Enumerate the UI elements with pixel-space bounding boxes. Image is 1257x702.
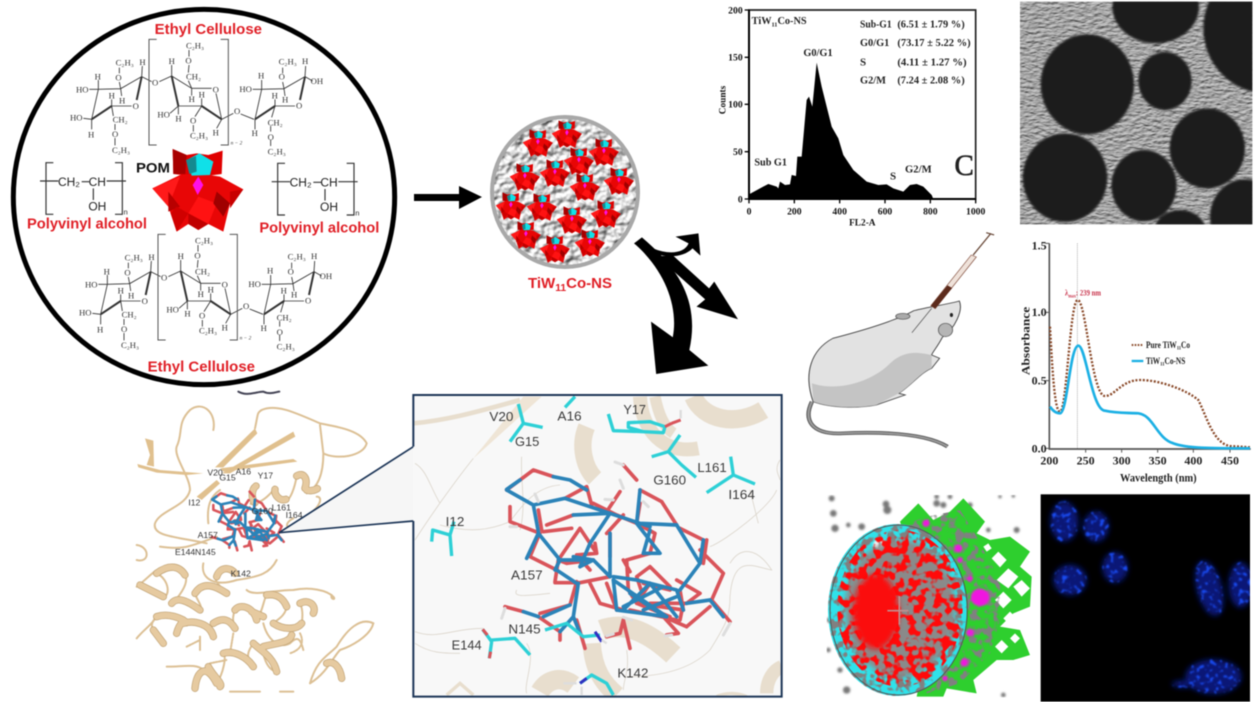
panel: docking close-up: [413, 395, 782, 697]
residue labels: A16: [557, 409, 582, 424]
annotations: [752, 15, 974, 182]
residue labels: K142: [617, 665, 648, 680]
structure: bottom ethyl cellulose: H: [208, 285, 214, 295]
structure: bottom ethyl cellulose: OH: [320, 271, 332, 281]
residue labels: V20: [207, 468, 223, 478]
structure: top ethyl cellulose: n − 2: [231, 141, 243, 147]
structure: top ethyl cellulose: H: [199, 90, 205, 100]
axes and frame: [749, 10, 976, 199]
structure: top ethyl cellulose: C₂H₃: [186, 41, 204, 51]
residue labels: [446, 402, 755, 680]
heading: Polyvinyl alcohol right: Polyvinyl alcohol: [259, 220, 379, 236]
residue labels: K142: [231, 569, 251, 579]
annotations: Co-NS: [777, 15, 807, 27]
structure: bottom ethyl cellulose: H: [261, 323, 267, 333]
icon: mouse with syringe: [809, 233, 994, 447]
annotations: Sub-G1: [860, 18, 892, 30]
ribbon loops: [137, 392, 373, 692]
heading: Ethyl Cellulose top: Ethyl Cellulose: [155, 22, 262, 38]
axis labels: 300: [1113, 454, 1131, 468]
structure: top ethyl cellulose: OH: [311, 76, 323, 86]
structure: top ethyl cellulose: O: [115, 73, 122, 83]
structure: polyvinyl alcohol left: OH: [88, 199, 106, 213]
residue labels: I12: [188, 498, 201, 508]
structure: top ethyl cellulose: H: [302, 56, 308, 66]
axis labels: 1.5: [1032, 238, 1047, 252]
legend: Co: [1181, 340, 1190, 350]
structure: polyvinyl alcohol right: CH₂: [290, 176, 312, 190]
residue labels: G160: [252, 506, 273, 516]
residue labels: V20: [489, 409, 513, 424]
white gaps: [983, 543, 1030, 653]
residue labels: G15: [219, 473, 236, 483]
annotations: G2/M: [905, 164, 932, 176]
hydrogens: [502, 462, 730, 636]
annotations: (7.24 ± 2.08 %): [897, 74, 965, 86]
chart: absorbance spectra: [1018, 238, 1251, 485]
annotations: S: [890, 170, 896, 182]
heading: POM label: POM: [136, 160, 170, 176]
heading: Ethyl Cellulose bottom: Ethyl Cellulose: [148, 359, 255, 375]
structure: polyvinyl alcohol left: [40, 163, 128, 217]
thin loops: [415, 457, 780, 693]
residue tips: [483, 420, 681, 658]
panel border: [413, 395, 782, 697]
axis labels: [1018, 238, 1239, 485]
legend: Co-NS: [1165, 356, 1185, 366]
structure: polyvinyl alcohol left: CH: [89, 175, 106, 189]
structure: bottom ethyl cellulose: C₂H₃: [125, 252, 143, 262]
residue labels: L161: [272, 503, 291, 513]
syringe barrel: [931, 255, 976, 309]
annotations: G2/M: [860, 74, 887, 86]
white holes: [873, 539, 887, 551]
panel: protein ribbon overview: [137, 392, 373, 692]
structure: top ethyl cellulose: O: [152, 78, 158, 88]
structure: bottom ethyl cellulose: C₂H₃: [199, 326, 217, 336]
structure: top ethyl cellulose: H: [175, 113, 182, 123]
structure: top ethyl cellulose: O: [213, 84, 219, 94]
axis labels: Wavelength (nm): [1120, 471, 1197, 485]
structure: bottom ethyl cellulose: O: [288, 266, 294, 276]
structure: bottom ethyl cellulose: H: [148, 252, 155, 262]
ligand cluster: [212, 492, 284, 550]
structure: top ethyl cellulose: C₂H₃: [268, 147, 286, 157]
structure: bottom ethyl cellulose: O: [142, 296, 148, 306]
red speckle: [837, 530, 963, 687]
structure: bottom ethyl cellulose: H: [291, 289, 297, 299]
residue labels: N145: [195, 547, 216, 557]
structure: top ethyl cellulose: HO: [157, 110, 170, 120]
structure: bottom ethyl cellulose: [79, 234, 332, 352]
axis labels: 200: [728, 5, 743, 16]
arrows: three curved branches: [634, 233, 738, 374]
axis labels: 400: [1184, 454, 1202, 468]
structure: bottom ethyl cellulose: H: [198, 289, 204, 299]
ear rear: [896, 313, 910, 319]
legend: TiW: [1146, 356, 1163, 366]
annotations: Sub G1: [754, 157, 787, 169]
structure: top ethyl cellulose: H: [88, 129, 94, 139]
curve: nanosphere: [1050, 346, 1250, 448]
structure: top ethyl cellulose: O: [234, 106, 240, 116]
structure: top ethyl cellulose: C₂H₃: [116, 57, 134, 67]
structure: bottom ethyl cellulose: H: [178, 251, 184, 261]
structure: bottom ethyl cellulose: O: [243, 301, 249, 311]
structure: top ethyl cellulose: H: [272, 90, 278, 100]
structure: top ethyl cellulose: H: [213, 127, 219, 137]
residue labels: I164: [286, 510, 303, 520]
structure: bottom ethyl cellulose: HO: [248, 279, 261, 289]
grey cyan speckle: [828, 524, 967, 696]
syringe fluid: [931, 285, 952, 309]
structure: top ethyl cellulose: CH₂: [186, 71, 201, 81]
structure: polyvinyl alcohol right: [272, 163, 359, 217]
axis labels: 50: [733, 147, 743, 158]
needle: [912, 308, 932, 333]
structure: bottom ethyl cellulose: CH₂: [122, 310, 137, 320]
ligand sticks: [505, 465, 730, 648]
panel: flow cytometry scatter: [826, 494, 1033, 697]
structure: top ethyl cellulose: [70, 39, 323, 157]
structure: bottom ethyl cellulose: H: [184, 308, 191, 318]
structure: bottom ethyl cellulose: H: [97, 324, 103, 334]
axis labels: 0: [738, 194, 743, 205]
axis labels: 350: [1149, 454, 1167, 468]
legend: [1132, 340, 1190, 368]
gate outline: [830, 525, 967, 695]
annotations: G0/G1: [860, 37, 889, 49]
structure: bottom ethyl cellulose: O: [194, 250, 201, 260]
annotations: (6.51 ± 1.79 %): [897, 18, 965, 30]
axis labels: 100: [728, 100, 743, 111]
axis labels: 400: [832, 207, 847, 218]
pale ribbons: [413, 397, 782, 697]
annotations: S: [860, 56, 866, 68]
grey speckle on green: [907, 510, 1000, 693]
structure: bottom ethyl cellulose: CH₂: [195, 266, 210, 276]
legend: 11: [1177, 346, 1181, 352]
structure: bottom ethyl cellulose: O: [124, 268, 131, 278]
heading: Polyvinyl alcohol left: Polyvinyl alcohol: [27, 216, 147, 232]
label: TiW11Co-NS: 11: [555, 283, 567, 294]
label: TiW11Co-NS: TiW: [528, 276, 554, 292]
axis labels: 1000: [966, 207, 985, 218]
structure: bottom ethyl cellulose: H: [128, 290, 134, 300]
ear front: [938, 323, 953, 337]
residue labels: I12: [446, 514, 464, 529]
structure: top ethyl cellulose: C₂H₃: [279, 56, 297, 66]
structure: bottom ethyl cellulose: H: [267, 266, 273, 276]
axis labels: 200: [1040, 454, 1058, 468]
axis labels: [718, 5, 985, 229]
structure: top ethyl cellulose: O: [185, 55, 192, 65]
body: [809, 301, 960, 407]
residue labels: A157: [198, 530, 218, 540]
structure: polyvinyl alcohol left: CH₂: [58, 175, 80, 189]
structure: bottom ethyl cellulose: H: [281, 285, 287, 295]
structure: bottom ethyl cellulose: H: [104, 266, 110, 276]
annotations: (73.17 ± 5.22 %): [897, 37, 971, 49]
structure: bottom ethyl cellulose: HO: [79, 308, 92, 318]
residue labels: G160: [653, 472, 686, 487]
textured sphere: [490, 115, 640, 270]
icon: POM polyhedron: [152, 149, 243, 232]
panel: nanosphere: [490, 115, 640, 294]
dark particles: [1020, 0, 1254, 226]
structure: top ethyl cellulose: O: [296, 100, 302, 110]
axes: [1049, 243, 1251, 449]
structure: bottom ethyl cellulose: O: [121, 324, 127, 334]
peak label: max: [1068, 293, 1076, 299]
green events: [900, 498, 1032, 697]
structure: polyvinyl alcohol right: OH: [320, 200, 338, 214]
structure: top ethyl cellulose: HO: [70, 113, 83, 123]
residue labels: Y17: [258, 471, 273, 481]
structure: top ethyl cellulose: H: [119, 95, 125, 105]
structure: bottom ethyl cellulose: O: [305, 295, 311, 305]
axis labels: FL2-A: [849, 219, 876, 229]
structure: top ethyl cellulose: H: [282, 94, 288, 104]
residue labels: A157: [511, 567, 543, 582]
structure: top ethyl cellulose: H: [258, 71, 264, 81]
structure: bottom ethyl cellulose: O: [199, 311, 205, 321]
body shadow: [812, 353, 932, 407]
nuclei glow: [1050, 502, 1253, 694]
structure: top ethyl cellulose: O: [133, 101, 139, 111]
icons: POM clusters: [496, 120, 634, 263]
structure: top ethyl cellulose: O: [112, 129, 118, 139]
cyan residues: [432, 397, 755, 695]
structure: top ethyl cellulose: H: [139, 57, 146, 67]
structure: bottom ethyl cellulose: C₂H₃: [277, 342, 295, 352]
residue labels: E144: [175, 547, 195, 557]
structure: top ethyl cellulose: O: [190, 116, 196, 126]
structure: bottom ethyl cellulose: O: [161, 273, 167, 283]
annotations: C: [954, 150, 974, 182]
background: [827, 495, 1033, 697]
curve: pure: [1050, 300, 1250, 447]
structure: bottom ethyl cellulose: C₂H₃: [121, 340, 139, 350]
annotations: G0/G1: [803, 47, 833, 59]
structure: bottom ethyl cellulose: HO: [85, 280, 98, 290]
magenta events: [922, 520, 989, 681]
photo: TEM nanospheres: [1019, 0, 1254, 226]
structure: top ethyl cellulose: HO: [76, 85, 89, 95]
residue labels: I164: [728, 487, 755, 502]
residue labels: N145: [508, 621, 541, 636]
grey under red: [845, 540, 955, 677]
axis labels: 600: [878, 207, 892, 218]
residue labels: G15: [515, 434, 539, 449]
axis labels: 200: [787, 207, 802, 218]
photo: blue stained nuclei: [1041, 494, 1253, 702]
structure: bottom ethyl cellulose: H: [118, 286, 124, 296]
structure: top ethyl cellulose: C₂H₃: [112, 145, 130, 155]
structure: bottom ethyl cellulose: O: [222, 279, 228, 289]
tail: [809, 402, 947, 447]
grey scatter: [826, 494, 1020, 697]
structure: bottom ethyl cellulose: H: [311, 251, 317, 261]
structure: top ethyl cellulose: O: [279, 71, 285, 81]
structure: bottom ethyl cellulose: O: [277, 327, 283, 337]
callout connector: [279, 447, 413, 533]
axis labels: 1.0: [1032, 305, 1047, 319]
axis labels: 800: [923, 207, 938, 218]
structure: top ethyl cellulose: CH₂: [268, 117, 283, 127]
panel background: [413, 395, 782, 697]
structure: top ethyl cellulose: H: [109, 91, 115, 101]
structure: polyvinyl alcohol right: CH: [320, 176, 338, 190]
arrow: to nanosphere: [414, 186, 482, 209]
structure: bottom ethyl cellulose: CH₂: [277, 312, 292, 322]
structure: bottom ethyl cellulose: HO: [166, 305, 179, 315]
beta sheets: [137, 428, 297, 500]
annotations: TiW: [752, 15, 773, 27]
annotations: 11: [772, 21, 777, 28]
chart: cell cycle histogram: [718, 5, 985, 229]
cyan gate region: [828, 524, 967, 696]
histogram area: [749, 63, 933, 199]
structure: polyvinyl alcohol left: n: [124, 208, 128, 217]
structure: bottom ethyl cellulose: H: [222, 322, 228, 332]
structure: top ethyl cellulose: CH₂: [113, 115, 128, 125]
structure: top ethyl cellulose: H: [189, 94, 195, 104]
residue labels: Y17: [623, 402, 646, 417]
axis labels: 150: [728, 53, 743, 64]
axis labels: 0.0: [1032, 442, 1047, 456]
alpha helices: [140, 475, 342, 688]
residue labels: E144: [452, 637, 482, 652]
residue labels: [175, 467, 303, 579]
plunger: [973, 233, 994, 255]
structure: top ethyl cellulose: O: [268, 132, 274, 142]
structure: bottom ethyl cellulose: C₂H₃: [288, 251, 306, 261]
peak label: : 239 nm: [1076, 287, 1102, 297]
vertical marker: [1076, 243, 1078, 448]
label: TiW11Co-NS: Co-NS: [566, 276, 612, 292]
helix faces: [140, 475, 342, 688]
axis labels: 0.5: [1032, 373, 1047, 387]
structure: polyvinyl alcohol right: n: [355, 208, 359, 217]
red core: [853, 574, 899, 649]
nuclei speckle: [1050, 501, 1253, 694]
axis labels: 450: [1221, 454, 1239, 468]
axis labels: Absorbance: [1018, 306, 1032, 375]
peak label: λ: [1065, 287, 1069, 297]
structure: top ethyl cellulose: C₂H₃: [190, 131, 208, 141]
structure: top ethyl cellulose: HO: [239, 84, 252, 94]
annotations: (4.11 ± 1.27 %): [897, 56, 967, 68]
eye: [950, 313, 953, 317]
axis labels: Counts: [718, 85, 728, 114]
center cross: [887, 596, 908, 625]
residue labels: A16: [236, 467, 251, 477]
structure: top ethyl cellulose: H: [252, 128, 258, 138]
circle outline: [13, 9, 395, 385]
sphere rim: [492, 117, 638, 267]
structure: top ethyl cellulose: H: [95, 71, 101, 81]
axis labels: 0: [747, 207, 752, 218]
structure: bottom ethyl cellulose: C₂H₃: [195, 236, 213, 246]
residue labels: L161: [697, 460, 727, 475]
structure: bottom ethyl cellulose: n − 2: [240, 336, 252, 342]
axis labels: 250: [1077, 454, 1095, 468]
structure: top ethyl cellulose: H: [169, 56, 175, 66]
legend: 11: [1160, 362, 1165, 368]
legend: Pure TiW: [1146, 340, 1184, 350]
panel: polymer matrix circle: [13, 9, 395, 385]
